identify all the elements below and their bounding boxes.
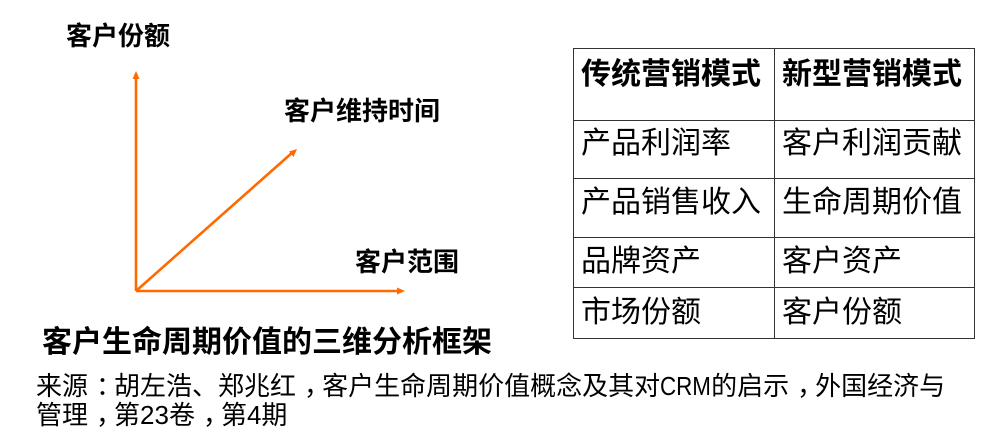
source note: 来源 ：胡左浩、郑兆红 ，客户生命周期价值概念及其对 的启示 ，外国经济与 (36, 371, 945, 401)
source note: 管理 ，第23卷 ，第4期 (36, 400, 287, 430)
comparison table: 传统营销模式 (581, 58, 761, 91)
chart caption: 客户生命周期价值的三维分析框架 (42, 326, 492, 359)
source note: CRM (660, 371, 711, 401)
axis label: customer scope: 客户范围 (355, 247, 459, 277)
comparison table: 客户利润贡献 (782, 127, 962, 160)
comparison table (573, 48, 975, 339)
comparison table: 生命周期价值 (782, 186, 962, 219)
axis label: retention time: 客户维持时间 (284, 96, 440, 126)
comparison table: 产品销售收入 (581, 186, 761, 219)
axis label: customer share: 客户份额 (66, 21, 170, 51)
source note (36, 371, 945, 430)
comparison table: 产品利润率 (581, 127, 731, 160)
comparison table: 市场份额 (581, 296, 701, 329)
comparison table: 客户份额 (782, 296, 902, 329)
comparison table: 客户资产 (782, 245, 902, 278)
comparison table: 新型营销模式 (782, 58, 962, 91)
comparison table: 品牌资产 (581, 245, 701, 278)
